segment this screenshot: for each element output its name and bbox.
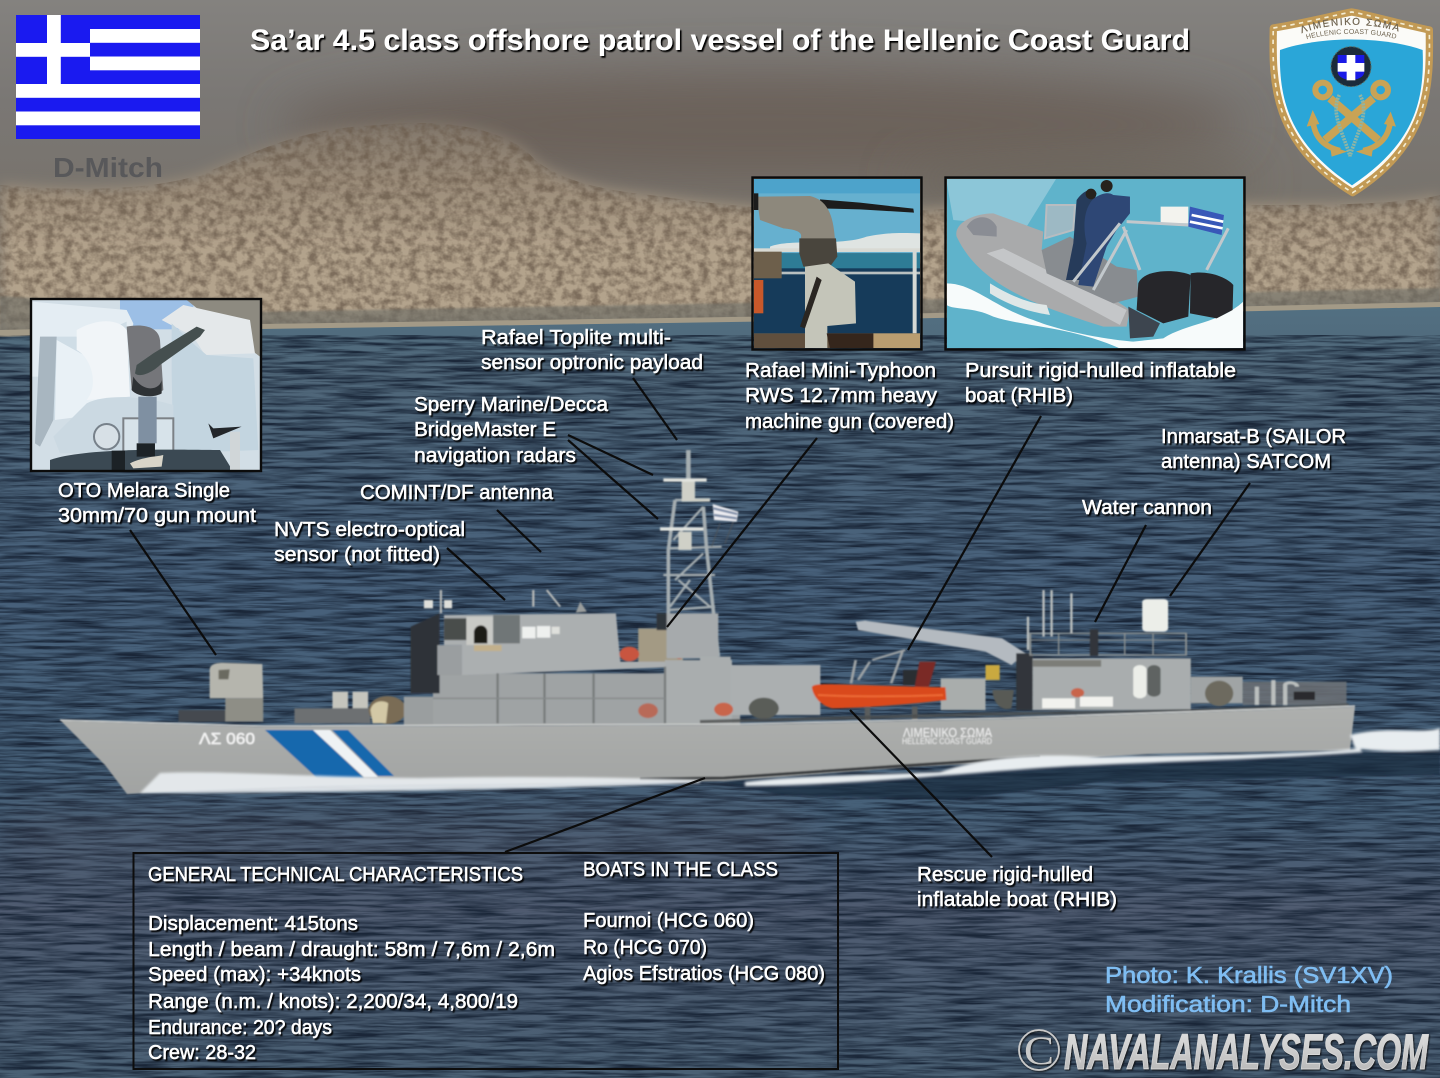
ship: forward superstructure and foredeck xyxy=(178,590,740,725)
photo credits: Photo: K. Krallis (SV1XV) xyxy=(1105,962,1393,988)
label: Mini-Typhoon xyxy=(745,360,954,433)
ship: hull xyxy=(60,707,1355,794)
label: Mini-Typhoon: machine gun (covered) xyxy=(745,411,954,433)
label: OTO Melara gun: 30mm/70 gun mount xyxy=(58,505,256,527)
photo frame: machine gun xyxy=(752,178,922,350)
panel: technical characteristics and boats in the class xyxy=(134,853,838,1069)
label: pursuit RHIB xyxy=(965,360,1236,407)
label: Rafael Toplite: sensor optronic payload xyxy=(481,352,703,374)
Greek flag xyxy=(16,15,200,139)
list: boats in the class: Ro (HCG 070) xyxy=(583,937,707,959)
callout labels xyxy=(58,327,1346,911)
table: general technical characteristics: Length / beam / draught: 58m / 7,6m / 2,6m xyxy=(148,939,555,961)
label: COMINT/DF antenna: COMINT/DF antenna xyxy=(360,482,554,504)
label: pursuit RHIB: Pursuit rigid-hulled inflatable xyxy=(965,360,1236,382)
ship: aft superstructure, crane and rescue boat xyxy=(700,590,1349,722)
photo frame: gun mount xyxy=(31,299,261,471)
list: boats in the class: BOATS IN THE CLASS xyxy=(583,859,778,881)
photo: pursuit RHIB xyxy=(946,178,1244,350)
label: rescue RHIB: Rescue rigid-hulled xyxy=(917,864,1093,886)
emblem: Hellenic Coast Guard shield: HELLENIC COAST GUARD xyxy=(1306,29,1396,40)
background: city on the shoreline xyxy=(0,123,1440,338)
label: rescue RHIB xyxy=(917,864,1117,911)
label: Mini-Typhoon: RWS 12.7mm heavy xyxy=(745,385,937,407)
label: navigation radars xyxy=(414,394,609,467)
leader lines xyxy=(130,378,1250,857)
label: Mini-Typhoon: Rafael Mini-Typhoon xyxy=(745,360,936,382)
ship: hull lettering xyxy=(902,726,993,746)
table: general technical characteristics: Displacement: 415tons xyxy=(148,913,358,935)
ship: Sa'ar 4.5 vessel xyxy=(60,450,1440,800)
ship: dark water under the stern xyxy=(720,752,1440,800)
label: NVTS sensor xyxy=(274,519,465,566)
label: OTO Melara gun xyxy=(58,480,256,527)
label: water cannon: Water cannon xyxy=(1082,497,1212,519)
list: boats in the class xyxy=(583,859,825,985)
list: boats in the class: Agios Efstratios (HCG 080) xyxy=(583,963,825,985)
ship: pennant number: ΛΣ 060 xyxy=(199,731,255,748)
label: navigation radars: navigation radars xyxy=(414,445,576,467)
table: general technical characteristics: Crew: 28-32 xyxy=(148,1042,256,1064)
photo: OTO Melara gun mount xyxy=(30,299,260,473)
table: general technical characteristics: Range (n.m. / knots): 2,200/34, 4,800/19 xyxy=(148,991,518,1013)
background: sea xyxy=(0,307,1440,1078)
ship: hull stripes xyxy=(265,730,394,778)
photo credits xyxy=(1105,962,1393,1017)
label: OTO Melara gun: OTO Melara Single xyxy=(58,480,230,502)
label: Rafael Toplite: Rafael Toplite multi- xyxy=(481,327,671,349)
table: general technical characteristics: Speed (max): +34knots xyxy=(148,964,361,986)
title: Sa’ar 4.5 class offshore patrol vessel of the Hellenic Coast Guard xyxy=(250,24,1190,57)
background: hazy sky and hills xyxy=(0,0,1440,340)
label: NVTS sensor: NVTS electro-optical xyxy=(274,519,465,541)
ship: mast with radars xyxy=(657,450,738,658)
ship: hull lettering: HELLENIC COAST GUARD xyxy=(902,736,992,746)
label: pursuit RHIB: boat (RHIB) xyxy=(965,385,1073,407)
emblem: Hellenic Coast Guard shield xyxy=(1270,8,1434,196)
watermark: NAVALANALYSES.COM: C xyxy=(1024,1028,1054,1073)
label: Rafael Toplite xyxy=(481,327,703,374)
label: navigation radars: BridgeMaster E xyxy=(414,419,556,441)
ship: bow wave and wake xyxy=(140,728,1440,793)
label: rescue RHIB: inflatable boat (RHIB) xyxy=(917,889,1117,911)
photo credits: Modification: D-Mitch xyxy=(1105,991,1351,1017)
list: boats in the class: Fournoi (HCG 060) xyxy=(583,910,754,932)
photo frame: RHIB xyxy=(946,178,1244,350)
table: general technical characteristics xyxy=(148,864,555,1064)
author credit: D-Mitch: D-Mitch xyxy=(53,152,163,183)
label: Inmarsat-B SATCOM xyxy=(1161,426,1346,473)
label: navigation radars: Sperry Marine/Decca xyxy=(414,394,609,416)
photo: Mini-Typhoon machine gun xyxy=(753,178,922,348)
ship: hull lettering: ΛΙΜΕΝΙΚΟ ΣΩΜΑ xyxy=(903,726,993,740)
label: NVTS sensor: sensor (not fitted) xyxy=(274,544,440,566)
table: general technical characteristics: GENERAL TECHNICAL CHARACTERISTICS xyxy=(148,864,523,886)
emblem: Hellenic Coast Guard shield: ΛΙΜΕΝΙΚΟ ΣΩΜΑ xyxy=(1302,18,1398,34)
label: Inmarsat-B SATCOM: Inmarsat-B (SAILOR xyxy=(1161,426,1346,448)
label: Inmarsat-B SATCOM: antenna) SATCOM xyxy=(1161,451,1331,473)
table: general technical characteristics: Endurance: 20? days xyxy=(148,1017,332,1039)
